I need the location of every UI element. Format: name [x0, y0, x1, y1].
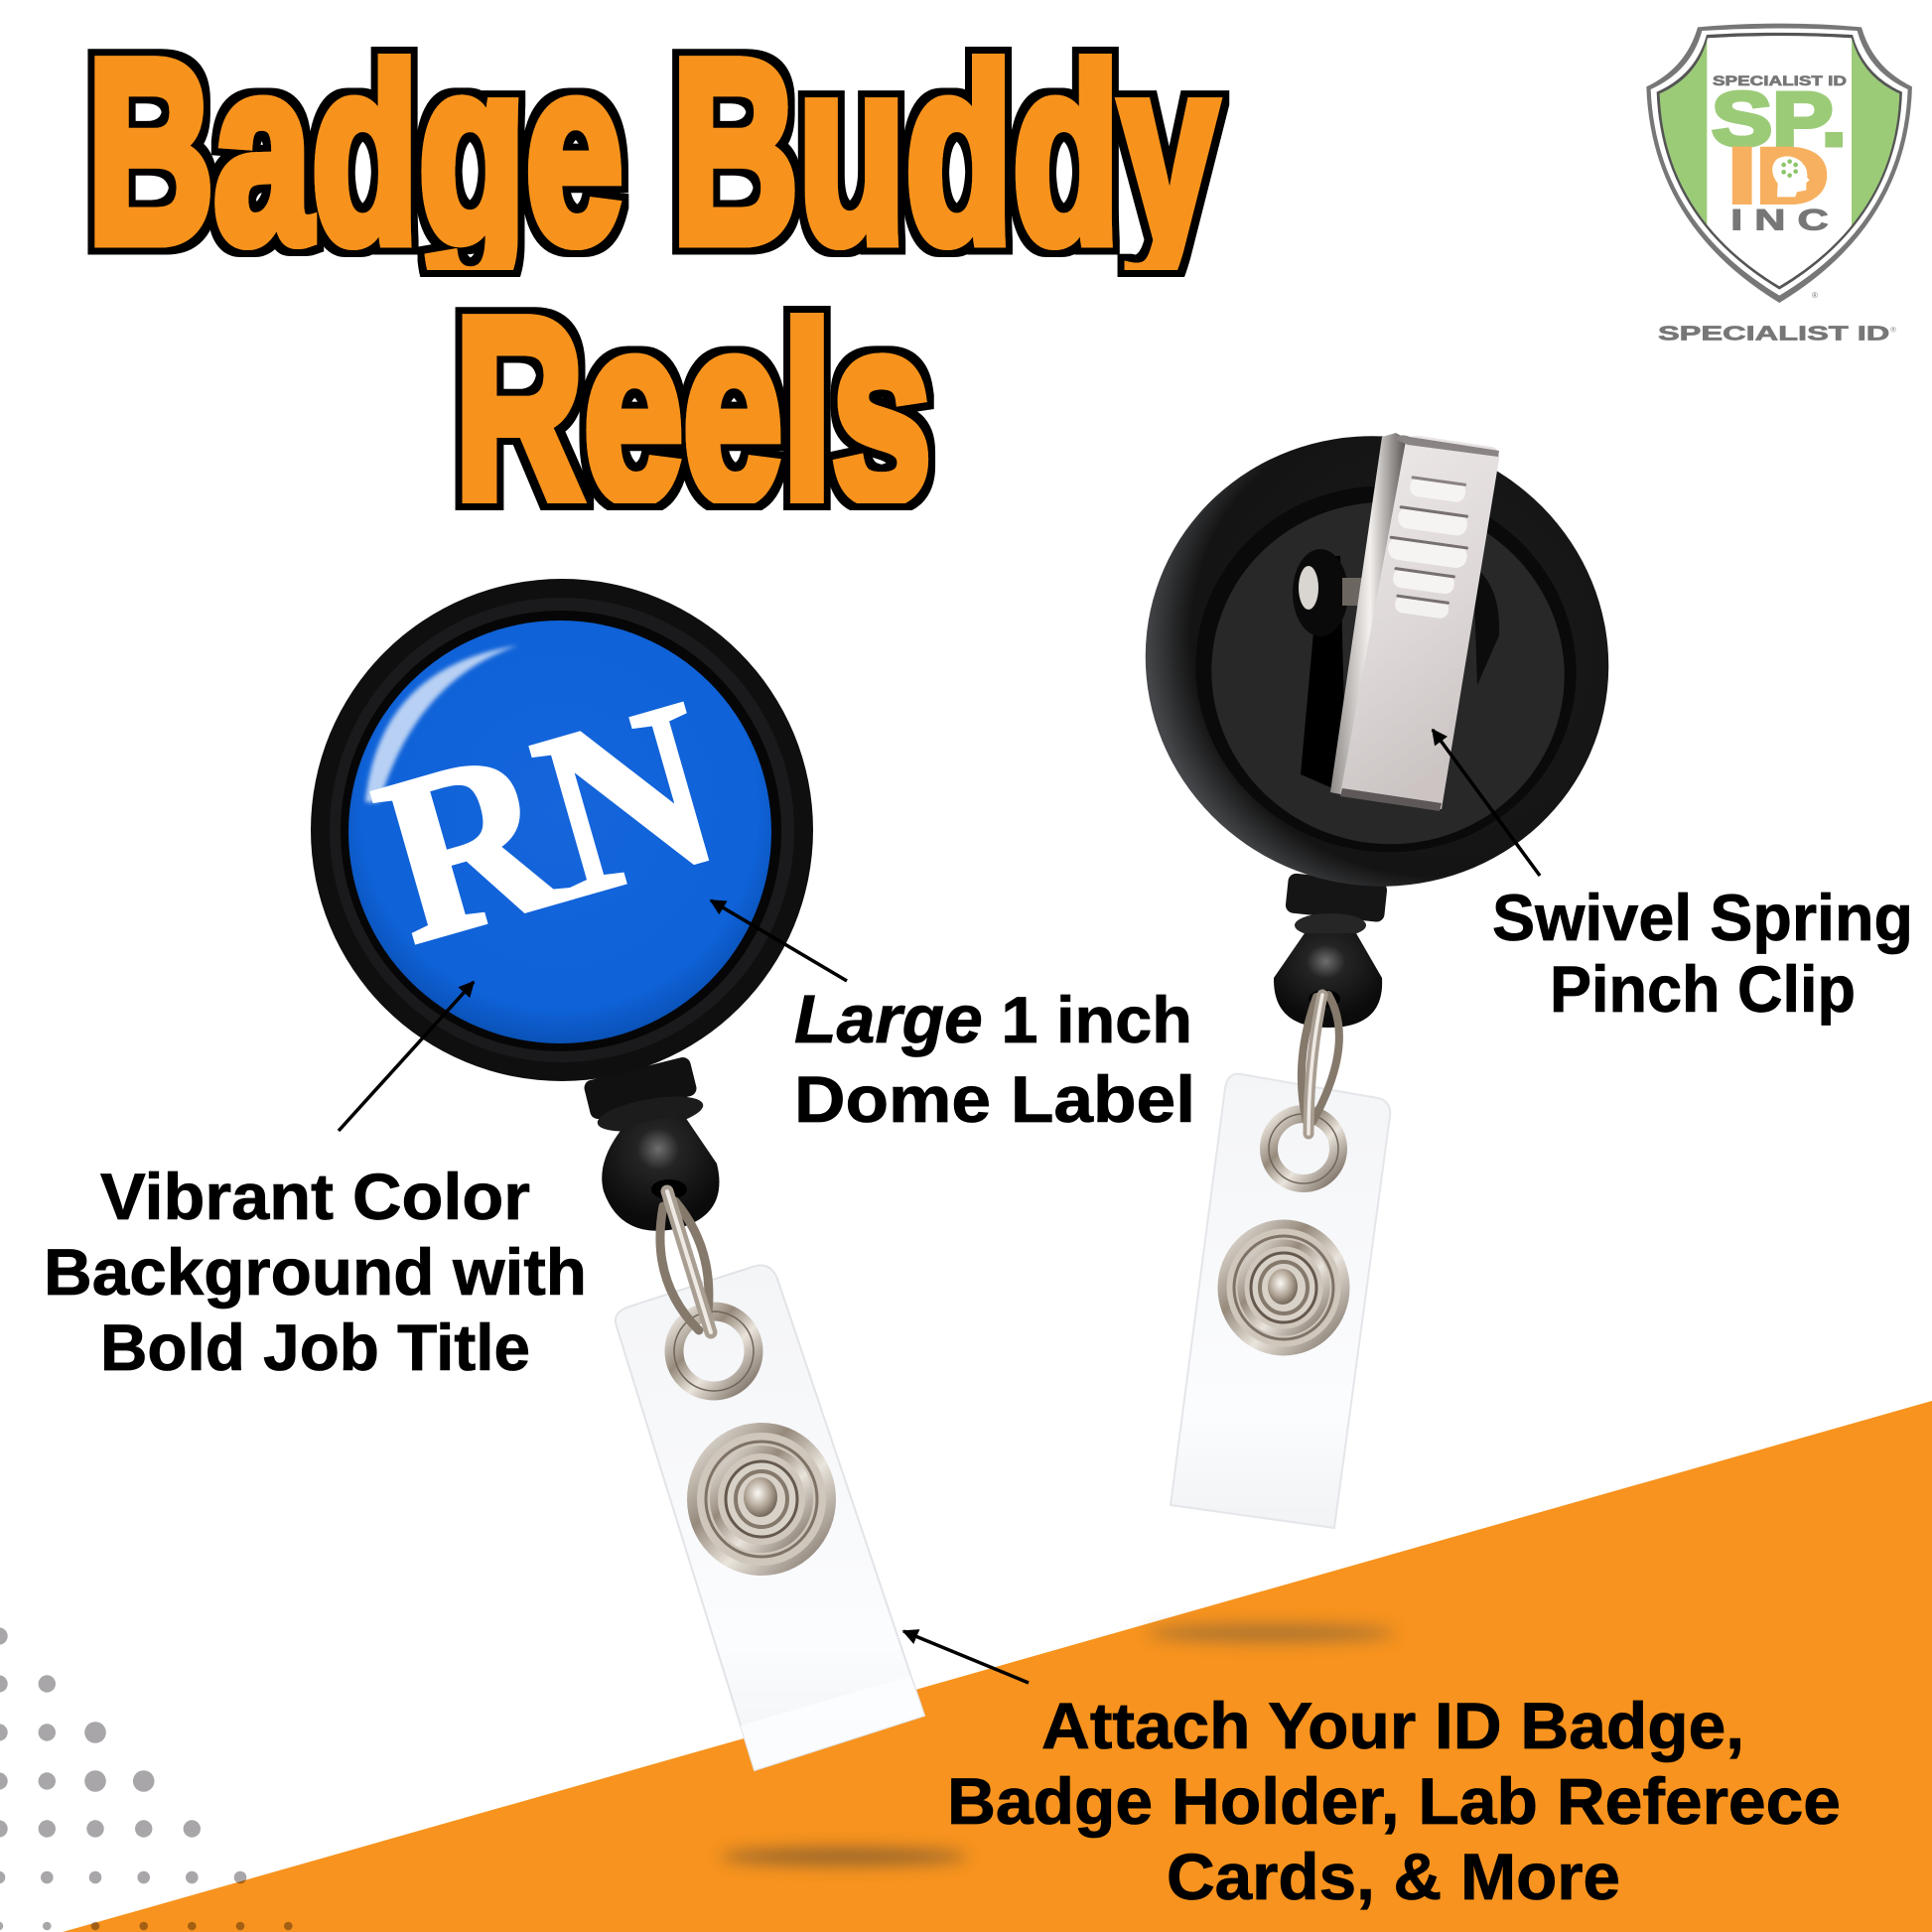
callout: pinch clip: Pinch Clip [1550, 952, 1856, 1026]
front reel product [311, 579, 924, 1770]
logo: Specialist ID shield: SP. [1712, 77, 1847, 163]
clip grip slots [1387, 476, 1468, 620]
logo: Specialist ID shield: ® [1890, 326, 1896, 335]
logo: Specialist ID shield: SPECIALIST ID [1658, 323, 1889, 345]
split ring [1302, 995, 1339, 1134]
logo: Specialist ID shield: I N C [1730, 205, 1829, 237]
callout: vibrant background [44, 982, 587, 1384]
dome highlight [365, 645, 518, 802]
callout: vibrant background: Bold Job Title [100, 1311, 530, 1384]
title [87, 47, 1229, 510]
strap tab [1171, 1074, 1390, 1528]
callout: vibrant background: Vibrant Color [100, 1160, 530, 1233]
snap button [1222, 1224, 1345, 1351]
title: Badge Buddy [87, 6, 1218, 298]
logo: Specialist ID shield: ® [1812, 291, 1818, 300]
eyelet ring [674, 1311, 754, 1391]
eyelet ring [1269, 1114, 1338, 1183]
swivel connector [583, 1055, 719, 1231]
callout: dome label: Dome Label [794, 1062, 1195, 1136]
strap tab [616, 1265, 924, 1770]
callout: dome label: Large 1 inch [794, 981, 1192, 1057]
callout: dome label [711, 900, 1195, 1136]
snap button [692, 1428, 831, 1571]
job title letters: RN [352, 648, 743, 994]
callout: pinch clip: Swivel Spring [1492, 881, 1913, 954]
blue dome label [348, 621, 771, 1043]
callout: pinch clip [1433, 730, 1913, 1026]
swivel connector [1274, 873, 1388, 1028]
orange diagonal panel [63, 1401, 1932, 1932]
callout: attach ID badge: Badge Holder, Lab Referece [947, 1764, 1841, 1838]
callout: attach ID badge: Cards, & More [1167, 1840, 1620, 1913]
logo: Specialist ID shield [1646, 24, 1912, 345]
logo: Specialist ID shield: ID [1728, 132, 1829, 219]
hinge ears [1293, 549, 1499, 685]
decorative dot grid [0, 1627, 293, 1930]
split ring [660, 1191, 711, 1332]
callout: vibrant background: Background with [44, 1235, 587, 1309]
logo: Specialist ID shield: SPECIALIST ID [1713, 72, 1847, 88]
icon: head silhouette [1772, 156, 1810, 197]
callout: attach ID badge: Attach Your ID Badge, [1041, 1689, 1744, 1762]
title: Reels [455, 264, 931, 555]
metal pinch clip [1330, 433, 1499, 811]
reel bezel [311, 579, 813, 1081]
callout: attach ID badge [903, 1631, 1841, 1913]
reel body back [1087, 376, 1667, 946]
back reel product [1087, 376, 1667, 1528]
